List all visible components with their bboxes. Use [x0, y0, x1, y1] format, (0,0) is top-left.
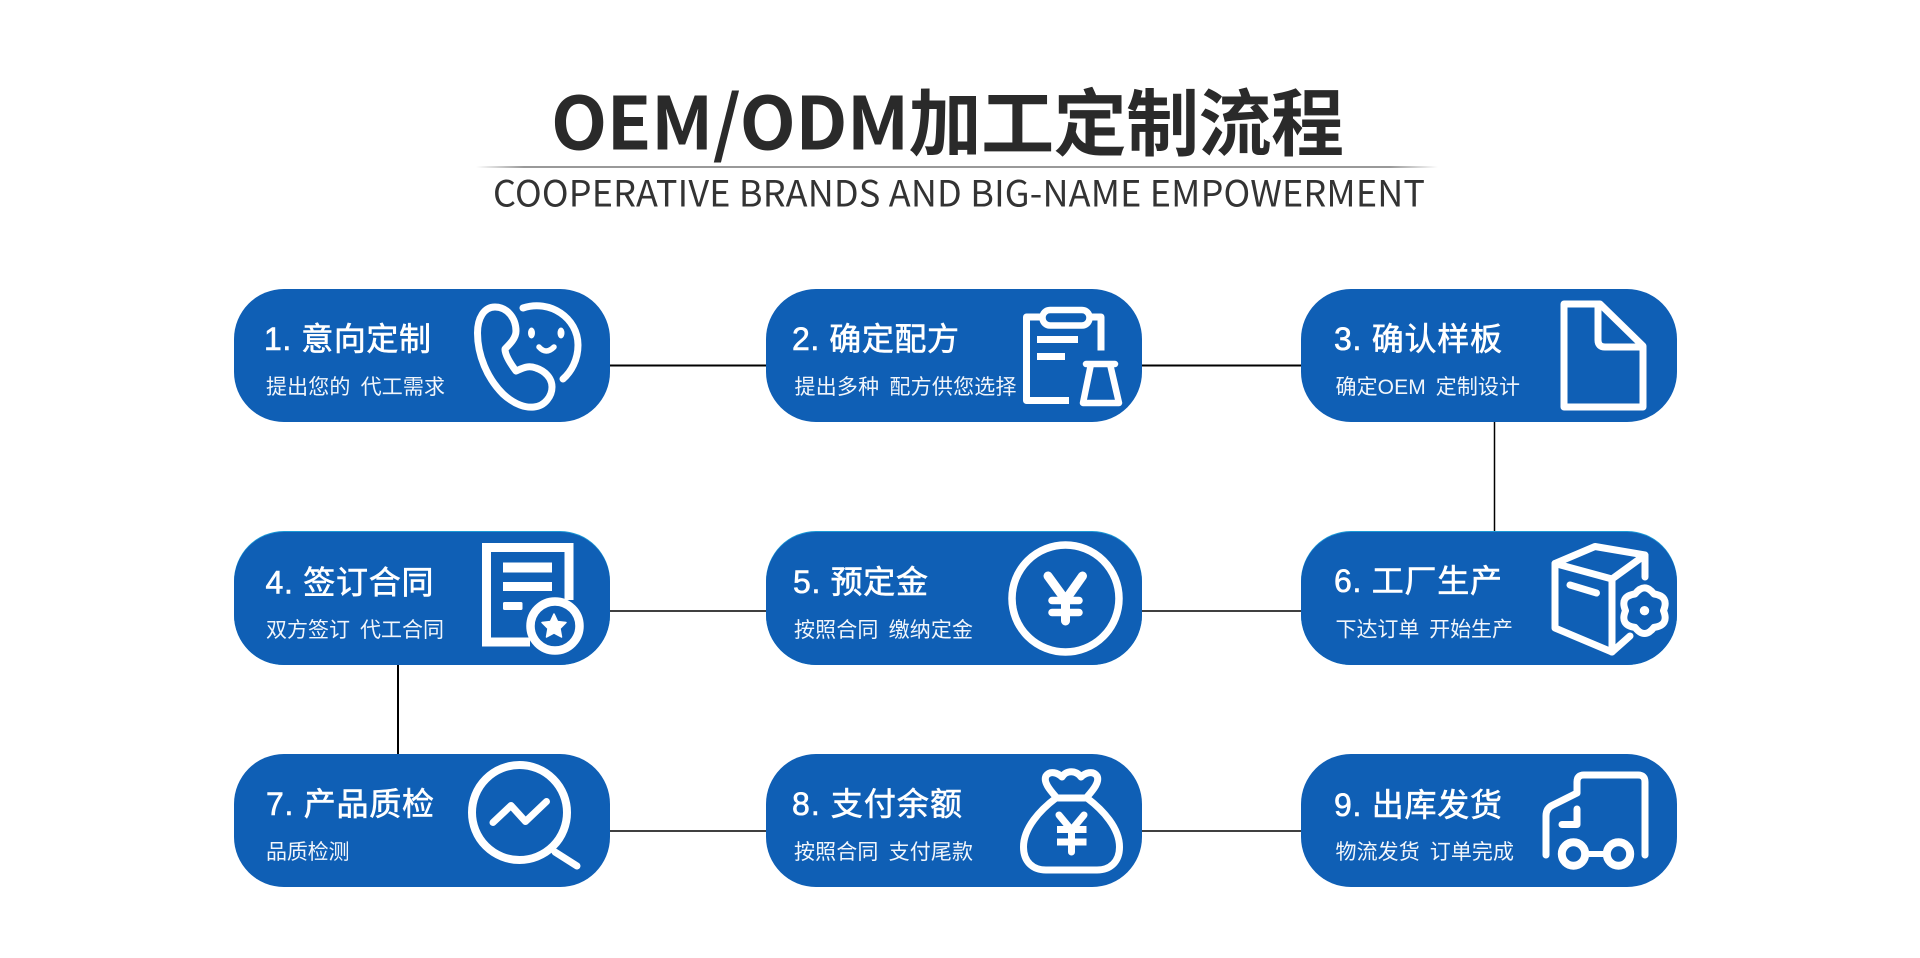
- panel: step 4: [234, 531, 610, 665]
- text: step 8 description: 按照合同 支付尾款: [794, 841, 973, 864]
- panel: step 3: [1301, 289, 1677, 422]
- heading: step 9: 9. 出库发货: [1334, 787, 1502, 823]
- panel: step 7: [234, 754, 610, 887]
- heading: step 5: 5. 预定金: [793, 564, 928, 600]
- subtitle: COOPERATIVE BRANDS AND BIG-NAME EMPOWERMENT: [493, 166, 1425, 218]
- panel: step 5: [766, 531, 1142, 665]
- heading: step 6: 6. 工厂生产: [1334, 563, 1502, 599]
- text: step 1 description: 提出您的 代工需求: [266, 376, 445, 399]
- heading: step 3: 3. 确认样板: [1334, 321, 1502, 357]
- heading: step 1: 1. 意向定制: [264, 321, 431, 357]
- icon: certificate with star: [486, 548, 580, 650]
- icon: document: [1564, 304, 1643, 407]
- text: step 9 description: 物流发货 订单完成: [1336, 841, 1514, 864]
- icon: clipboard and flask: [1026, 310, 1119, 403]
- icon: money bag: [1024, 772, 1120, 870]
- heading: step 4: 4. 签订合同: [266, 564, 434, 600]
- panel: step 9: [1301, 754, 1677, 887]
- icon: delivery truck: [1546, 775, 1645, 866]
- panel: step 6: [1301, 531, 1677, 665]
- panel: step 1: [234, 289, 610, 422]
- text: step 5 description: 按照合同 缴纳定金: [794, 619, 973, 642]
- text: step 4 description: 双方签订 代工合同: [266, 619, 444, 642]
- text: step 3 description: 确定OEM 定制设计: [1336, 376, 1520, 399]
- icon: magnifier with trend line: [472, 765, 577, 866]
- icon: yen coin: [1012, 545, 1119, 652]
- heading: step 7: 7. 产品质检: [266, 786, 434, 822]
- connector lines between steps: [398, 366, 1494, 831]
- text: step 2 description: 提出多种 配方供您选择: [794, 376, 1016, 399]
- panel: step 2: [766, 289, 1142, 422]
- icon: box with gear: [1555, 546, 1665, 652]
- heading: step 2: 2. 确定配方: [792, 321, 959, 357]
- heading: step 8: 8. 支付余额: [792, 786, 962, 822]
- title: OEM/ODM加工定制流程: [551, 66, 1344, 172]
- title underline: [476, 166, 1438, 168]
- text: step 7 description: 品质检测: [266, 841, 350, 864]
- icon: smiling phone: [478, 306, 578, 407]
- panel: step 8: [766, 754, 1142, 887]
- text: step 6 description: 下达订单 开始生产: [1336, 618, 1513, 642]
